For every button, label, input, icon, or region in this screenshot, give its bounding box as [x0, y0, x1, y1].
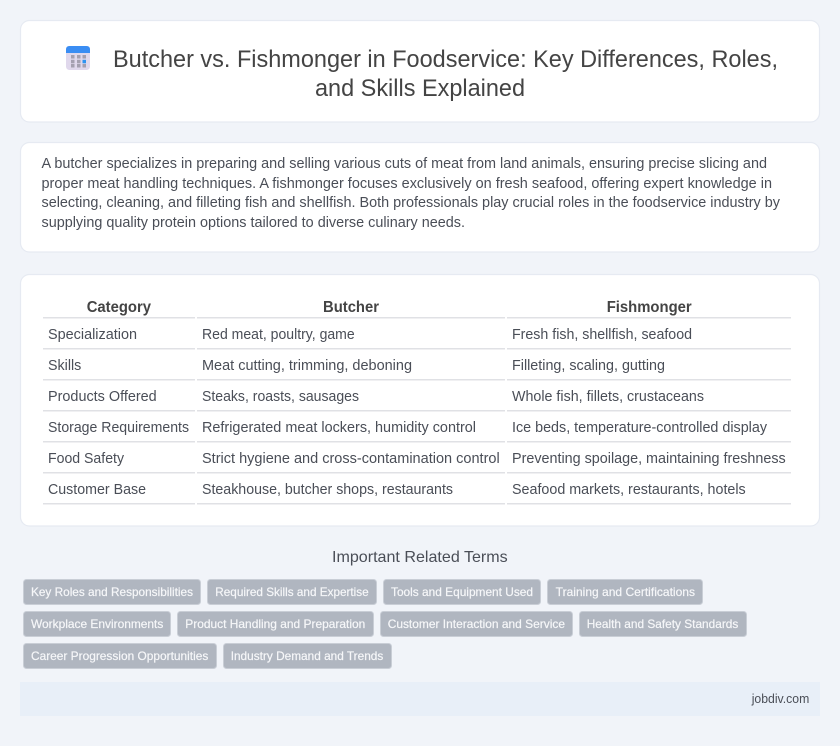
row: specialization [43, 327, 791, 350]
title [113, 46, 778, 102]
table header: Butcher [323, 299, 379, 316]
footer [20, 682, 820, 716]
text block: description: proper meat handling techniques. A fishmonger focuses exclusively on fresh seafood, offering expert knowledge in [42, 176, 772, 192]
related term tags: Required Skills and Expertise [215, 585, 369, 599]
heading: important related terms: Important Related Terms [332, 549, 508, 566]
row: specialization: Specialization [48, 327, 137, 343]
text block: description: A butcher specializes in preparing and selling various cuts of meat from land animals, ensuring precise slicing and [42, 156, 767, 172]
text block: description [42, 156, 781, 231]
footer: jobdiv.com [751, 692, 809, 706]
row: customer base: Steakhouse, butcher shops, restaurants [202, 482, 453, 498]
panel: title card [20, 20, 820, 122]
row: skills: Meat cutting, trimming, deboning [202, 358, 412, 374]
row: products offered: Steaks, roasts, sausages [202, 389, 359, 405]
table header: Fishmonger [607, 299, 692, 316]
related term tags: Training and Certifications [556, 585, 695, 599]
row: skills [43, 358, 791, 380]
row: specialization: Red meat, poultry, game [202, 327, 355, 343]
row: storage requirements: Refrigerated meat lockers, humidity control [202, 420, 476, 436]
row: products offered: Whole fish, fillets, crustaceans [512, 389, 704, 405]
text block: description: supplying quality protein options tailored to diverse culinary needs. [42, 215, 465, 231]
related term tags: Tools and Equipment Used [391, 585, 533, 599]
row: customer base: Customer Base [48, 482, 146, 498]
related term tags: Workplace Environments [31, 617, 163, 631]
row: food safety [43, 451, 791, 474]
table header: Category [87, 299, 151, 316]
related term tags: Product Handling and Preparation [185, 617, 365, 631]
row: customer base: Seafood markets, restaurants, hotels [512, 482, 746, 498]
title: and Skills Explained [315, 75, 525, 102]
row: skills: Filleting, scaling, gutting [512, 358, 665, 374]
row: customer base [43, 482, 791, 504]
text block: description: selecting, cleaning, and filleting fish and shellfish. Both professionals play crucial roles in the foodservice industry by [42, 195, 781, 211]
related term tags: Health and Safety Standards [587, 617, 738, 631]
related term tags: Customer Interaction and Service [388, 617, 565, 631]
row: storage requirements: Ice beds, temperature-controlled display [512, 420, 768, 436]
row: skills: Skills [48, 358, 81, 374]
row: storage requirements: Storage Requirements [48, 420, 189, 436]
related term tags: Key Roles and Responsibilities [31, 585, 193, 599]
row: food safety: Strict hygiene and cross-contamination control [202, 451, 500, 467]
related term tags: Career Progression Opportunities [31, 649, 208, 663]
title: Butcher vs. Fishmonger in Foodservice: Key Differences, Roles, [113, 46, 778, 73]
table header [43, 299, 791, 318]
related term tags [24, 580, 746, 668]
row: products offered [43, 389, 791, 412]
panel: comparison table [20, 274, 820, 526]
panel: description [20, 142, 820, 252]
icon: calendar [66, 46, 90, 70]
row: specialization: Fresh fish, shellfish, seafood [512, 327, 692, 343]
row: products offered: Products Offered [48, 389, 157, 405]
row: food safety: Preventing spoilage, maintaining freshness [512, 451, 786, 467]
row: storage requirements [43, 420, 791, 442]
row: food safety: Food Safety [48, 451, 125, 467]
related term tags: Industry Demand and Trends [231, 649, 383, 663]
